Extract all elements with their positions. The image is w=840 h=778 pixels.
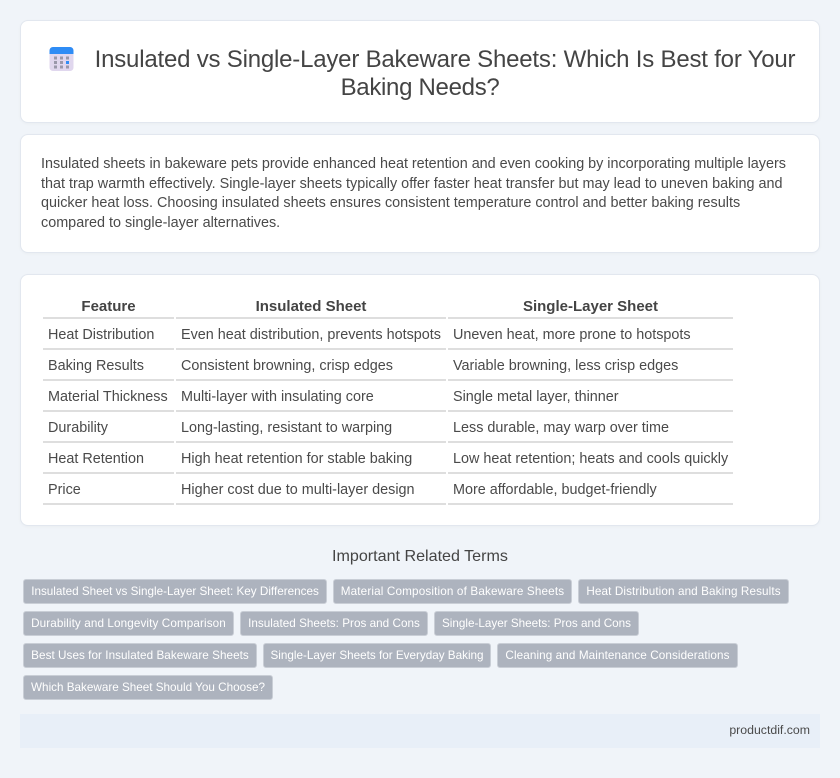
comparison table: Uneven heat, more prone to hotspots	[453, 327, 691, 343]
comparison table: Less durable, may warp over time	[453, 420, 669, 436]
comparison table: Insulated Sheet	[256, 298, 366, 315]
comparison table: More affordable, budget-friendly	[453, 482, 657, 498]
panel: summary card	[20, 134, 820, 253]
comparison table: Low heat retention; heats and cools quickly	[453, 451, 728, 467]
related term tags: Single-Layer Sheets: Pros and Cons	[442, 617, 631, 630]
comparison table: Variable browning, less crisp edges	[453, 358, 678, 374]
related term tags: Insulated Sheet vs Single-Layer Sheet: Key Differences	[31, 585, 319, 598]
related term tags: Best Uses for Insulated Bakeware Sheets	[31, 649, 249, 662]
title: Insulated vs Single-Layer Bakeware Sheets: Which Is Best for Your	[95, 46, 795, 73]
summary text: compared to single-layer alternatives.	[41, 214, 280, 230]
comparison table: Even heat distribution, prevents hotspots	[181, 327, 441, 343]
related term tags: Insulated Sheets: Pros and Cons	[248, 617, 420, 630]
summary text	[41, 156, 786, 230]
comparison table: Single-Layer Sheet	[523, 298, 658, 315]
related term tags: Which Bakeware Sheet Should You Choose?	[31, 681, 265, 694]
comparison table: Feature	[81, 298, 136, 315]
comparison table: Material Thickness	[48, 389, 168, 405]
title	[95, 46, 796, 101]
comparison table: Long-lasting, resistant to warping	[181, 420, 392, 436]
summary text: that trap warmth effectively. Single-layer sheets typically offer faster heat transfer but may lead to uneven baking and	[41, 176, 783, 192]
comparison table: Consistent browning, crisp edges	[181, 358, 393, 374]
related term tags: Material Composition of Bakeware Sheets	[341, 585, 564, 598]
comparison table: High heat retention for stable baking	[181, 451, 412, 467]
icon: calendar	[50, 47, 74, 71]
related term tags: Durability and Longevity Comparison	[31, 617, 226, 630]
panel: comparison table card	[20, 274, 820, 526]
summary text: quicker heat loss. Choosing insulated sheets ensures consistent temperature control and better baking results	[41, 195, 740, 211]
comparison table: Higher cost due to multi-layer design	[181, 482, 415, 498]
title: Baking Needs?	[341, 74, 499, 101]
comparison table: Durability	[48, 420, 108, 436]
related term tags	[23, 579, 789, 700]
heading: related terms: Important Related Terms	[332, 547, 508, 565]
comparison table: Baking Results	[48, 358, 144, 374]
comparison table: Heat Distribution	[48, 327, 154, 343]
comparison table: Single metal layer, thinner	[453, 389, 619, 405]
comparison table: Price	[48, 482, 81, 498]
related term tags: Single-Layer Sheets for Everyday Baking	[270, 649, 484, 662]
panel: title card	[20, 20, 820, 123]
comparison table	[43, 298, 733, 505]
related term tags: Heat Distribution and Baking Results	[586, 585, 781, 598]
footer source text: productdif.com	[729, 723, 810, 737]
comparison table: Heat Retention	[48, 451, 144, 467]
summary text: Insulated sheets in bakeware pets provide enhanced heat retention and even cooking by incorporating multiple layers	[41, 156, 786, 172]
footer	[20, 714, 820, 748]
related term tags: Cleaning and Maintenance Considerations	[505, 649, 730, 662]
comparison table: Multi-layer with insulating core	[181, 389, 374, 405]
